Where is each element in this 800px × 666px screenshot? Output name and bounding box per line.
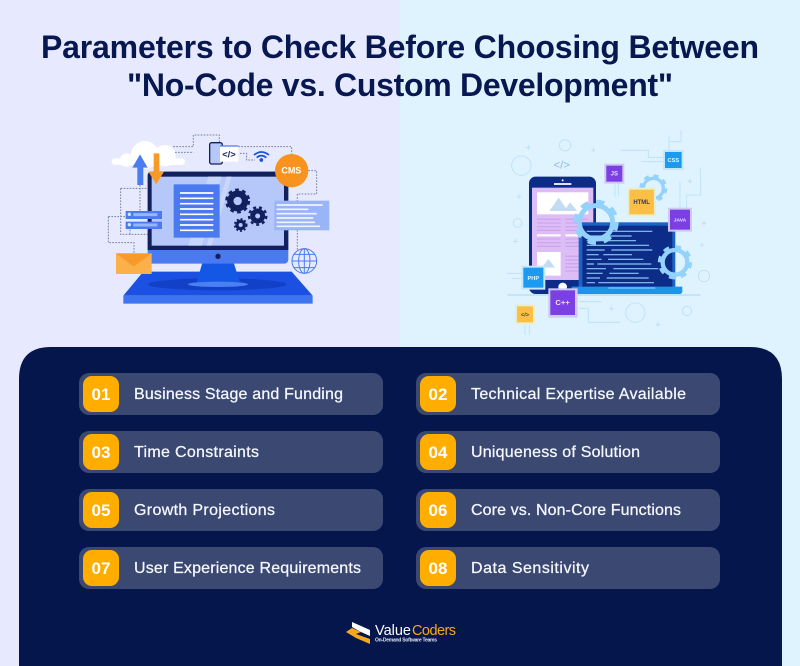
icon: CMS badge (275, 154, 308, 187)
title: Parameters to Check Before Choosing Between (41, 29, 759, 65)
tag: JS: JS (611, 172, 618, 178)
item 01: 01 (92, 385, 110, 404)
icon: down arrow (148, 153, 164, 184)
tag: CSS: CSS (667, 158, 679, 164)
panel: parameters (19, 347, 782, 666)
item 06: 06 (429, 501, 447, 520)
icon: cloud (112, 141, 185, 169)
tag: C++ (548, 288, 578, 318)
item 01: Business Stage and Funding (134, 386, 343, 403)
baseline (507, 292, 701, 297)
tag: JAVA: JAVA (674, 218, 687, 224)
item 03: Time Constraints (134, 444, 259, 461)
tag: PHP: PHP (528, 276, 539, 282)
icon: wifi (254, 152, 269, 161)
tag: HTML: HTML (633, 200, 650, 206)
logo: ValueCoders: On-Demand Software Teams (375, 638, 437, 644)
icon: phone (529, 177, 596, 294)
item 04: Uniqueness of Solution (471, 444, 640, 461)
item 03 (79, 431, 383, 473)
tag: HTML (627, 188, 656, 216)
item 04 (416, 431, 720, 473)
icon: keyboard base (123, 272, 313, 304)
item 07 (79, 547, 383, 589)
icon: phone with code (210, 143, 238, 164)
tag: PHP (521, 266, 545, 290)
tag: code: </> (521, 313, 530, 319)
illustration: custom development (507, 130, 710, 335)
item 02: Technical Expertise Available (471, 386, 686, 403)
logo: ValueCoders: Value (375, 623, 411, 639)
item 08: 08 (429, 559, 447, 578)
tag: CSS (663, 150, 684, 170)
item 03: 03 (92, 443, 110, 462)
item 01 (79, 373, 383, 415)
item 02: 02 (429, 385, 447, 404)
icon: phone with code: </> (222, 149, 236, 159)
icon: up arrow (132, 154, 148, 185)
item 05 (79, 489, 383, 531)
icon: laptop (572, 222, 682, 294)
logo: ValueCoders: Coders (412, 623, 456, 639)
item 08 (416, 547, 720, 589)
title: "No-Code vs. Custom Development" (127, 67, 673, 103)
tag: C++: C++ (555, 298, 570, 307)
item 06: Core vs. Non-Core Functions (471, 502, 681, 519)
tag: JS (604, 164, 624, 184)
item 06 (416, 489, 720, 531)
item 02 (416, 373, 720, 415)
icon: envelope (116, 253, 152, 274)
icon: CMS badge: CMS (281, 166, 301, 176)
code glyph: </> (553, 159, 570, 171)
icon: globe (292, 249, 317, 273)
icon: logo mark (346, 622, 370, 644)
icon: text panel (274, 201, 329, 230)
item 07: 07 (92, 559, 110, 578)
item 04: 04 (429, 443, 448, 462)
tag: JAVA (668, 208, 692, 232)
icon: monitor (148, 172, 288, 287)
item 08: Data Sensitivity (471, 560, 589, 577)
title (41, 29, 759, 103)
item 05: Growth Projections (134, 502, 275, 519)
item 07: User Experience Requirements (134, 560, 361, 577)
icon: profile cards (126, 211, 162, 229)
tag: code (515, 304, 535, 324)
logo: ValueCoders (346, 622, 456, 644)
item 05: 05 (92, 501, 110, 520)
illustration: no-code computer (108, 135, 329, 304)
icon: gears (575, 176, 691, 278)
